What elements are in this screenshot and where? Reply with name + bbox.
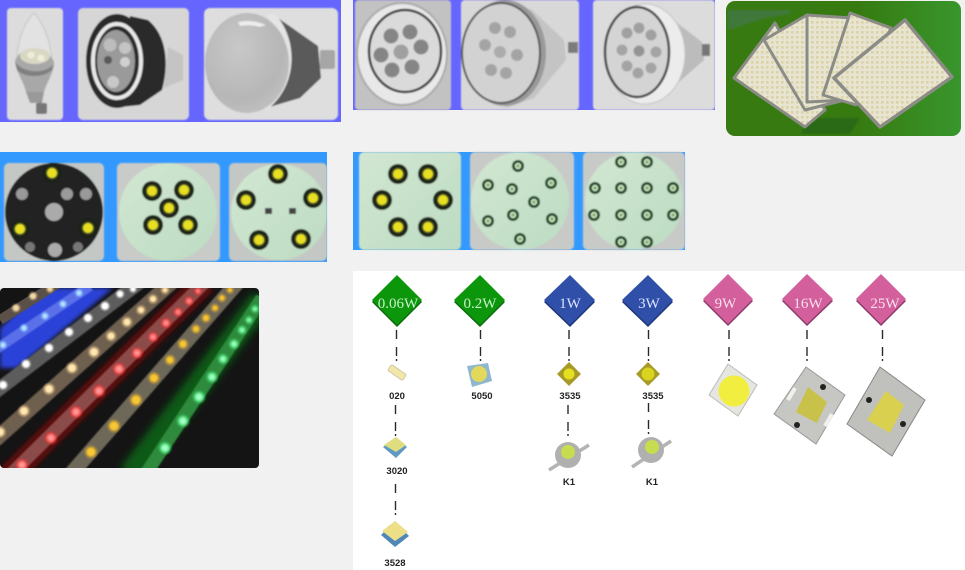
panel: LED circuit boards 3 to 6 chips bbox=[0, 152, 327, 262]
panel light 3 bbox=[807, 15, 852, 102]
wattage badge: 1W: 1W bbox=[559, 296, 582, 312]
strip: white bbox=[0, 282, 140, 392]
panel: LED panel lights on green bbox=[726, 1, 961, 136]
LED package: K1: K1 bbox=[646, 477, 659, 488]
LED package: 3528: 3528 bbox=[384, 558, 406, 569]
panel light 2 bbox=[764, 15, 845, 110]
column: 0.2W package bbox=[454, 275, 505, 402]
column: 1W packages bbox=[544, 275, 595, 488]
panel: LED bulbs group 2 bbox=[353, 0, 715, 110]
column: 25W package bbox=[847, 274, 925, 456]
wattage badge: 3W: 3W bbox=[638, 296, 661, 312]
LED package: K1: K1 bbox=[563, 477, 576, 488]
wattage badge: 16W bbox=[782, 274, 833, 326]
LED package: 5050: 5050 bbox=[471, 391, 493, 402]
wattage badge: 3W bbox=[622, 275, 673, 327]
panel light 1 bbox=[734, 23, 825, 127]
circuit board: six LED ring bbox=[359, 152, 461, 250]
strip: warm white bbox=[0, 282, 172, 440]
column: 9W package bbox=[703, 274, 757, 416]
column: 3W packages bbox=[622, 275, 673, 488]
column: 16W package bbox=[774, 274, 845, 444]
LED package: 020 bbox=[388, 364, 406, 402]
wattage badge: 0.06W: 0.06W bbox=[378, 296, 419, 312]
strip: yellow bbox=[70, 282, 238, 475]
panel: LED bulbs group 1 bbox=[0, 0, 341, 122]
wattage badge: 9W: 9W bbox=[715, 296, 737, 312]
panel light 5 bbox=[834, 20, 952, 127]
wattage badge: 25W bbox=[856, 274, 906, 326]
LED package: 3020 bbox=[383, 437, 408, 477]
LED package: 3020: 3020 bbox=[386, 466, 408, 477]
bulb photo: twelve lens angled view bbox=[593, 0, 715, 110]
LED package: K1 bbox=[632, 437, 671, 488]
LED package: 3535: 3535 bbox=[559, 391, 581, 402]
wattage badge: 0.2W: 0.2W bbox=[464, 296, 497, 312]
LED package: 9W chip bbox=[709, 364, 757, 416]
strip: brown top corner bbox=[0, 282, 60, 320]
LED package: 3528 bbox=[381, 521, 409, 569]
wattage badge: 9W bbox=[703, 274, 753, 326]
LED package: 25W chip bbox=[847, 367, 925, 456]
LED package: K1 bbox=[549, 442, 589, 488]
circuit board: nine LED bbox=[470, 152, 574, 250]
wattage badge: 16W: 16W bbox=[793, 296, 823, 312]
circuit board: five LED cluster bbox=[117, 163, 220, 261]
strip: blue bbox=[0, 286, 113, 368]
wattage badge: 1W bbox=[544, 275, 595, 327]
bulb photo: seven lens front view bbox=[355, 0, 451, 110]
wattage badge: 25W: 25W bbox=[870, 296, 900, 312]
circuit board: black three LED bbox=[4, 163, 104, 261]
strip: red bbox=[5, 282, 205, 480]
strip: green bbox=[130, 298, 262, 475]
LED package: 16W chip bbox=[774, 367, 845, 444]
bulb photo: black spotlight bbox=[78, 8, 189, 120]
LED package: 3535 bbox=[557, 362, 581, 402]
column: 0.06W packages bbox=[372, 275, 422, 569]
LED package: 020: 020 bbox=[389, 391, 405, 402]
circuit board: five LED ring bbox=[229, 163, 327, 261]
panel: LED circuit boards 6 to 12 chips bbox=[353, 152, 685, 250]
LED package: 3535 bbox=[636, 362, 664, 402]
LED package: 3535: 3535 bbox=[642, 391, 664, 402]
bulb photo: globe bulb bbox=[204, 8, 338, 120]
bulb photo: nine lens side view bbox=[461, 0, 579, 110]
bulb photo: candle lamp bbox=[7, 8, 63, 120]
panel: coloured LED strips photo bbox=[0, 288, 259, 468]
wattage badge: 0.06W bbox=[372, 275, 422, 327]
panel light 4 bbox=[823, 13, 891, 105]
panel: LED package chart by wattage bbox=[353, 271, 965, 570]
circuit board: twelve LED bbox=[583, 152, 685, 250]
